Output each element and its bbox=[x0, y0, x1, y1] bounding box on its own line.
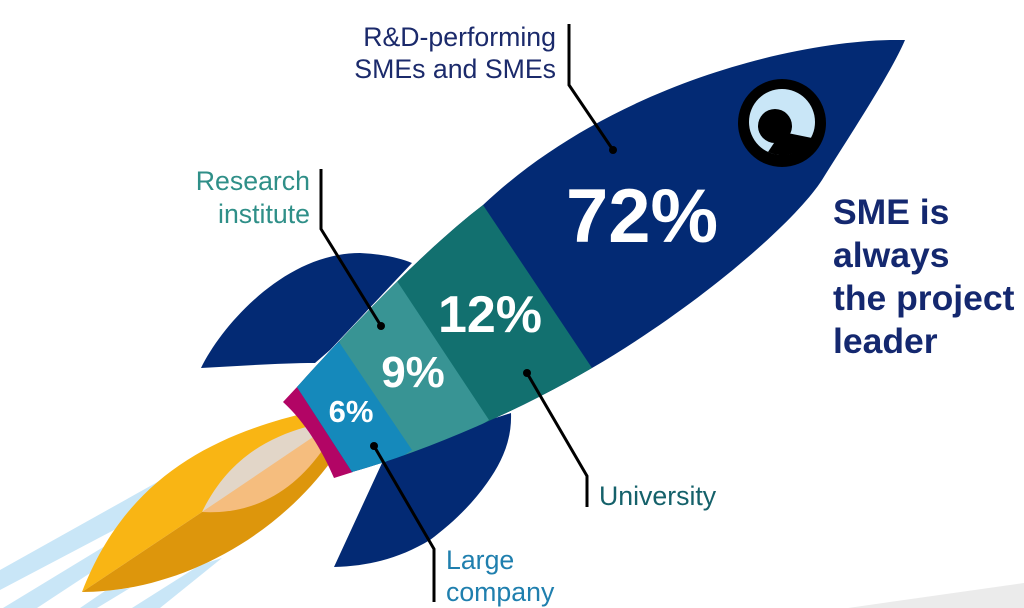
label: large company: company bbox=[446, 577, 555, 607]
value: 9%: 9% bbox=[381, 348, 445, 397]
flame upper half bbox=[82, 412, 335, 592]
callout: SME is always the project leader: leader bbox=[833, 321, 938, 361]
bottom fin bbox=[334, 413, 511, 567]
label: research institute: Research bbox=[196, 166, 310, 196]
callout: SME is always the project leader: the project bbox=[833, 278, 1015, 318]
segment: 72% SMEs bbox=[297, 40, 905, 472]
label: research institute: institute bbox=[218, 199, 310, 229]
segment: 12% university bbox=[397, 205, 592, 440]
leader: research institute bbox=[321, 169, 385, 330]
segment: 9% research institute bbox=[339, 281, 489, 470]
flame inner light bbox=[202, 427, 318, 512]
label: university: University bbox=[599, 481, 717, 511]
nozzle bbox=[283, 387, 353, 478]
speed streaks bbox=[0, 475, 222, 608]
flame lower half bbox=[82, 440, 332, 592]
label: large company: Large bbox=[446, 545, 514, 575]
leader: R&D-performing SMEs bbox=[569, 24, 617, 154]
porthole bbox=[738, 79, 826, 167]
value: 72%: 72% bbox=[566, 174, 718, 259]
segment: 6% large company bbox=[297, 342, 412, 472]
flame bbox=[82, 412, 335, 592]
label: R&D-performing SMEs and SMEs: SMEs and SMEs bbox=[354, 54, 556, 84]
leader: large company bbox=[370, 442, 434, 602]
value: 12%: 12% bbox=[438, 286, 542, 344]
callout: SME is always the project leader: SME is bbox=[833, 192, 949, 232]
callout: SME is always the project leader: always bbox=[833, 235, 949, 275]
leader: university bbox=[523, 369, 587, 507]
corner shade bbox=[848, 583, 1024, 608]
label: R&D-performing SMEs and SMEs: R&D-performing bbox=[363, 22, 556, 52]
flame inner peach bbox=[202, 435, 324, 512]
top fin bbox=[201, 253, 412, 368]
rocket body bbox=[297, 40, 905, 472]
value: 6%: 6% bbox=[329, 394, 373, 429]
